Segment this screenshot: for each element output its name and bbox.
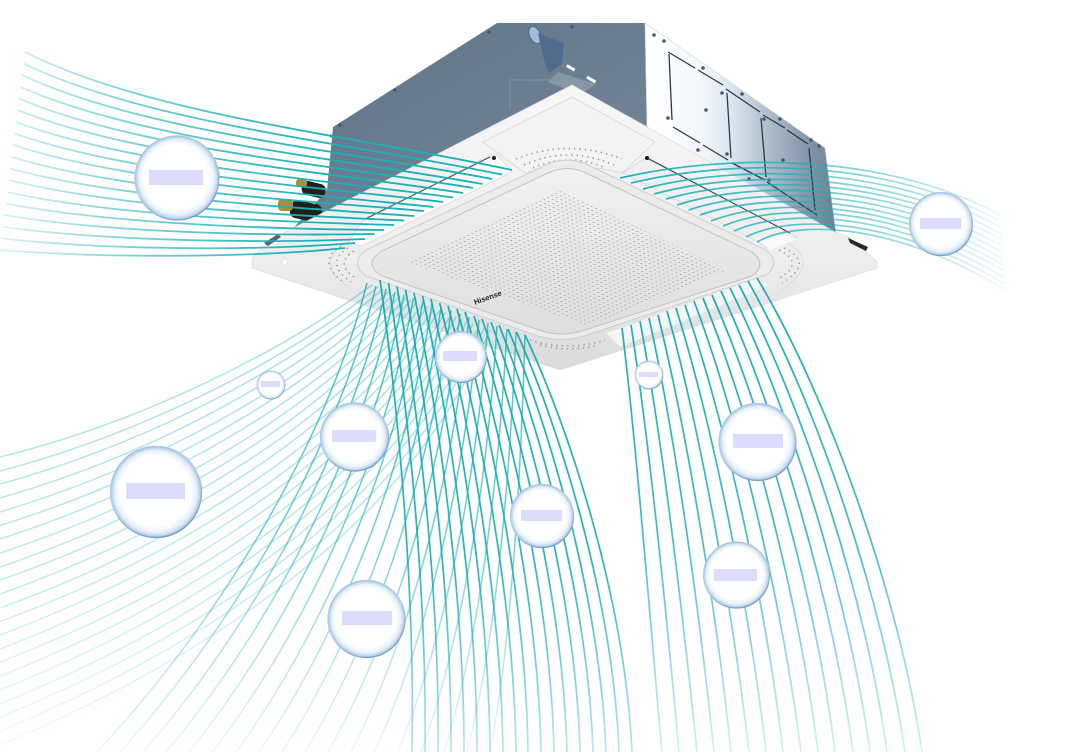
brand name: Hisense	[473, 288, 503, 307]
front air outlet slot	[606, 278, 770, 347]
airflow: front-right bundle	[622, 278, 922, 752]
left air outlet slot	[348, 155, 512, 246]
bubble 6	[110, 446, 202, 538]
grille perforation dots	[411, 191, 727, 324]
corner lid	[483, 97, 655, 173]
bubble 5	[320, 403, 388, 471]
bubble 10	[704, 542, 770, 608]
bubble 7	[510, 484, 574, 548]
unit body: light side face	[645, 23, 836, 234]
ceiling panel	[252, 85, 877, 370]
corner connector and fixing hole	[264, 234, 868, 265]
bubble 8	[635, 361, 663, 389]
side vent rings	[330, 240, 803, 354]
airflow: far left pale sweep	[0, 285, 490, 745]
bubble 4	[257, 371, 285, 399]
bubble 3	[436, 332, 486, 382]
side and body screws	[330, 25, 821, 182]
vent dot arcs	[329, 148, 799, 349]
bubble 11	[328, 580, 405, 658]
airflow: right outlet bundle	[620, 162, 1005, 290]
unit body: dark rear face	[290, 23, 647, 232]
airflow: front-left bundle curving right	[380, 280, 632, 752]
refrigerant pipe connectors	[278, 179, 327, 223]
side access plate seams	[668, 52, 817, 215]
bubble 1	[135, 136, 219, 220]
central grille	[372, 168, 760, 334]
bubble 9	[719, 404, 796, 480]
airflow: front-left bundle curving left	[97, 283, 525, 752]
indoor unit	[252, 23, 877, 370]
right air outlet slot	[623, 156, 797, 250]
bubble 2	[910, 192, 972, 256]
airflow: left outlet bundle	[0, 52, 512, 256]
grille outer rim	[358, 160, 774, 340]
mounting bracket and drain fitting	[510, 25, 596, 110]
